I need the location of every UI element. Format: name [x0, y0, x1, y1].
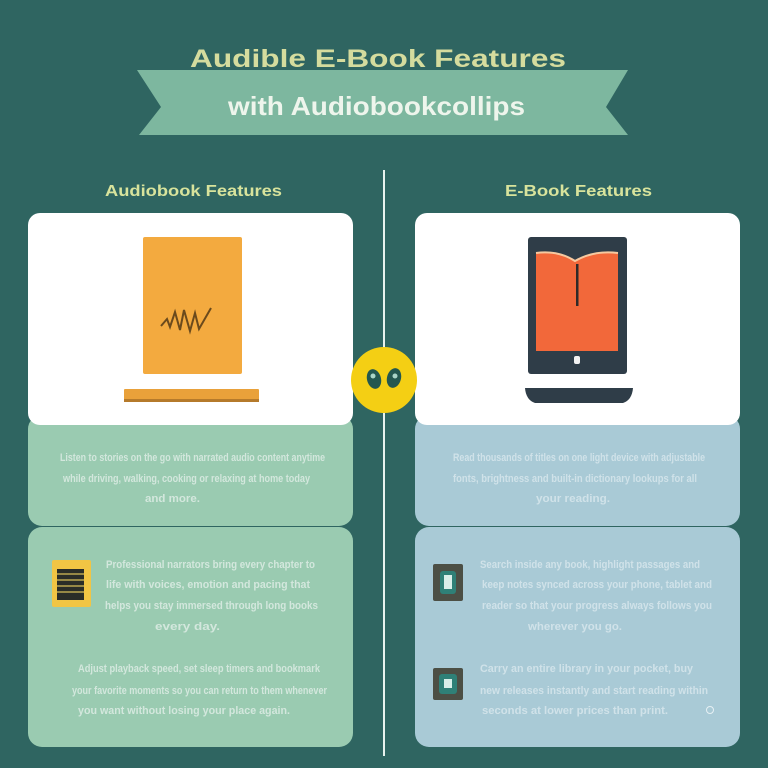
text block: left feature one: every day. [155, 621, 220, 633]
icon: tablet with book [528, 237, 627, 374]
icon: device two [433, 668, 463, 700]
right column heading: E-Book Features [505, 183, 652, 200]
text block: right feature one: Search inside any book, highlight passages and [480, 559, 700, 571]
center divider line [383, 170, 385, 756]
badge: center circle [351, 347, 417, 413]
text block: right feature one: reader so that your progress always follows you [482, 600, 712, 612]
text block: left feature one: Professional narrators bring every chapter to [106, 559, 315, 571]
text block: left summary: and more. [145, 493, 200, 505]
text block: right summary [453, 452, 705, 505]
panel: right details blue [415, 527, 740, 747]
icon: orange book [143, 237, 242, 374]
text block: right feature two: Carry an entire library in your pocket, buy [480, 663, 694, 675]
title: Audible E-Book Features [190, 45, 566, 73]
ribbon banner with subtitle: with Audiobookcollips [227, 91, 525, 121]
text block: right summary: fonts, brightness and built-in dictionary lookups for all [453, 473, 697, 485]
text block: right feature one: wherever you go. [527, 621, 622, 633]
icon: yellow chip [52, 560, 91, 607]
text block: left feature two [72, 663, 328, 717]
text block: right feature two [480, 663, 708, 717]
icon: book base [124, 389, 259, 402]
text block: right feature one [480, 559, 712, 633]
text block: left summary: while driving, walking, cooking or relaxing at home today [62, 473, 311, 485]
text block: left summary: Listen to stories on the go with narrated audio content anytime [60, 452, 325, 464]
panel: right image card [415, 213, 740, 425]
text block: right summary: your reading. [536, 493, 610, 505]
panel: left image card [28, 213, 353, 425]
text block: left feature one [105, 559, 318, 633]
panel: left text green [28, 415, 353, 526]
ribbon banner with subtitle [137, 70, 628, 135]
text block: right summary: Read thousands of titles on one light device with adjustable [453, 452, 705, 464]
text block: right feature one: keep notes synced across your phone, tablet and [482, 579, 712, 591]
panel: right text blue [415, 415, 740, 526]
text block: right feature two: seconds at lower prices than print. [482, 705, 668, 717]
small circle marker [706, 706, 714, 714]
text block: left summary [60, 452, 325, 505]
panel: left details green [28, 527, 353, 747]
icon: tablet base [525, 388, 633, 403]
icon: device one [433, 564, 463, 601]
text block: left feature two: your favorite moments so you can return to them whenever [72, 685, 328, 697]
text block: left feature two: you want without losing your place again. [78, 705, 290, 717]
text block: left feature one: helps you stay immersed through long books [105, 600, 318, 612]
text block: right feature two: new releases instantly and start reading within [480, 685, 708, 697]
left column heading: Audiobook Features [105, 183, 282, 200]
text block: left feature two: Adjust playback speed, set sleep timers and bookmark [78, 663, 321, 675]
text block: left feature one: life with voices, emotion and pacing that [106, 579, 310, 591]
